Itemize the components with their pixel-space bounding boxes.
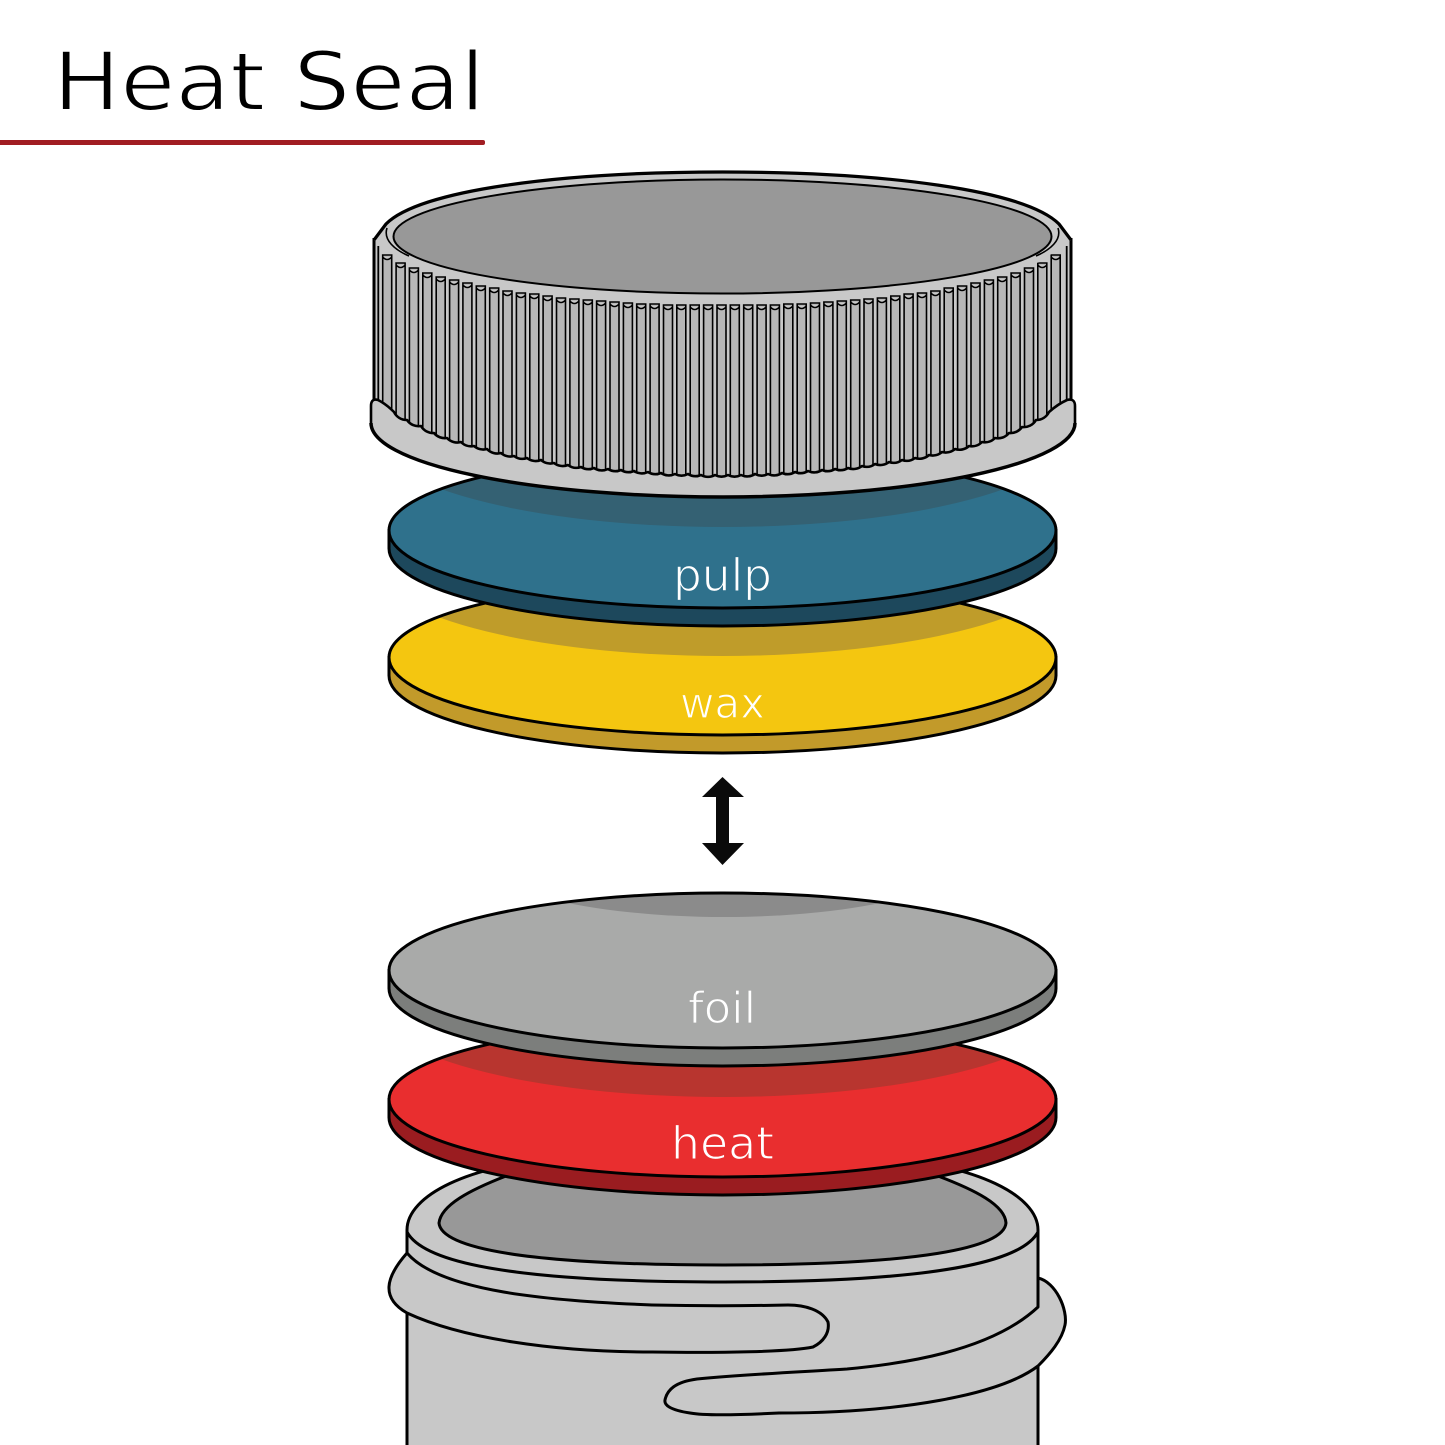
cap bottom flange xyxy=(371,400,1075,497)
cap rim xyxy=(374,172,1071,296)
heat disk outline xyxy=(389,1022,1056,1177)
pulp disk side xyxy=(389,530,1056,626)
pulp disk top xyxy=(389,453,1056,608)
heat disk side xyxy=(389,1100,1056,1195)
cap rim top outline xyxy=(374,172,1071,240)
foil disk top xyxy=(389,893,1056,1048)
disk: wax xyxy=(388,603,1058,754)
disk: heat xyxy=(388,1044,1058,1196)
jar lip front edge xyxy=(407,1232,1038,1282)
double-headed arrow xyxy=(702,777,744,865)
cap knurled ribs xyxy=(383,255,1060,490)
cap edge strips xyxy=(378,246,1067,410)
pulp disk shadow xyxy=(443,478,1002,527)
bottle cap xyxy=(371,172,1075,497)
cap side outlines xyxy=(374,238,1071,410)
cap inner recess xyxy=(394,180,1052,294)
label: pulp: pulp xyxy=(673,549,772,602)
wax disk shadow xyxy=(440,604,1005,656)
pulp disk outline xyxy=(389,453,1056,608)
foil disk outline xyxy=(389,893,1056,1048)
left thread xyxy=(389,1253,828,1352)
cap side wall xyxy=(374,224,1071,496)
heat disk top xyxy=(389,1022,1056,1177)
title: Heat Seal xyxy=(53,36,485,130)
label: wax: wax xyxy=(680,679,765,729)
right thread xyxy=(665,1278,1065,1415)
foil disk side xyxy=(389,970,1056,1066)
cap rim inner lines xyxy=(386,228,1059,256)
disk: foil xyxy=(388,892,1058,1068)
jar opening xyxy=(439,1176,1006,1265)
heat disk shadow xyxy=(442,1046,1004,1097)
wax disk side xyxy=(389,658,1056,753)
jar body xyxy=(407,1158,1038,1445)
cap flange bottom outline xyxy=(371,423,1075,497)
jar neck xyxy=(389,1158,1065,1445)
wax disk top xyxy=(389,580,1056,735)
foil disk shadow xyxy=(569,894,878,917)
title underline xyxy=(0,140,485,145)
label: heat: heat xyxy=(671,1117,774,1170)
label: foil: foil xyxy=(688,983,756,1034)
wax disk outline xyxy=(389,580,1056,735)
disk: pulp xyxy=(388,477,1058,628)
